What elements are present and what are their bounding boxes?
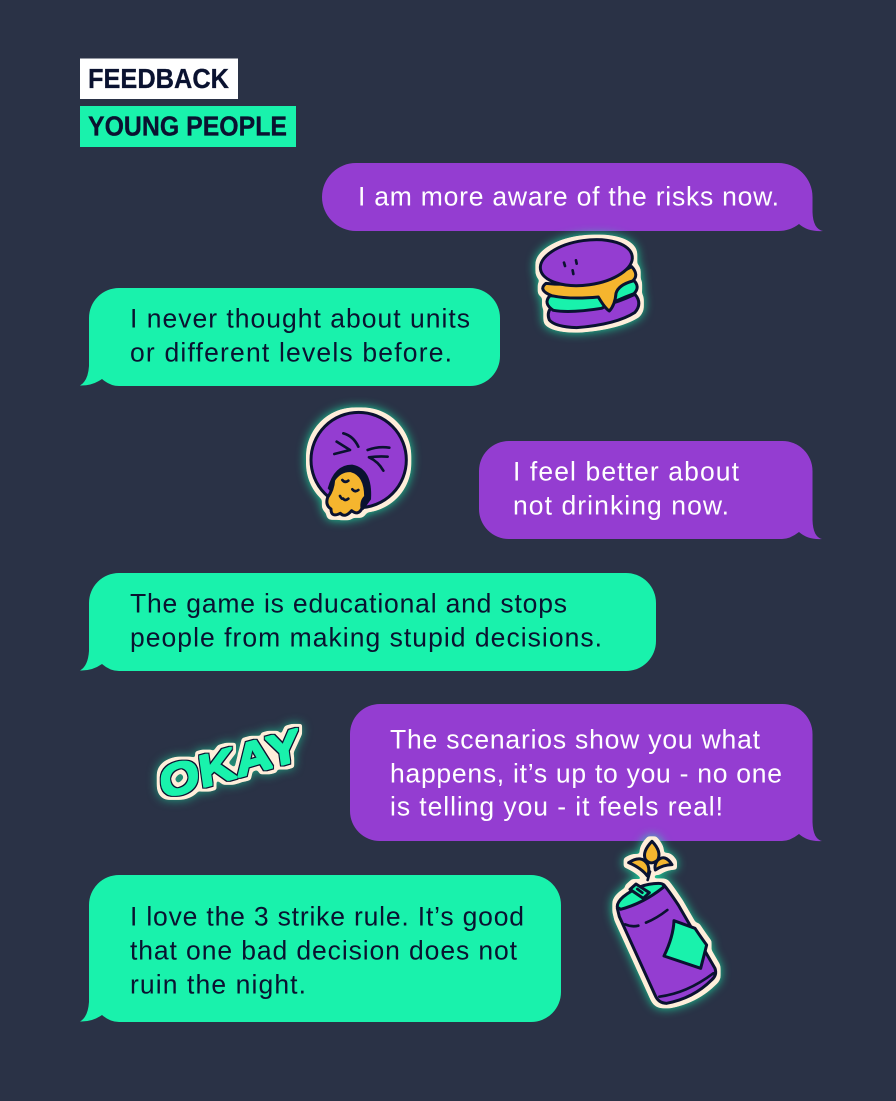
speech bubble: units <box>80 288 500 386</box>
speech bubble: scenarios <box>350 704 822 841</box>
icon: spilling drink can <box>617 841 716 1003</box>
icon: vomiting face <box>311 412 406 515</box>
heading: feedback: FEEDBACK <box>88 63 229 94</box>
speech bubble: educational: The game is educational and stops <box>130 588 567 618</box>
sticker: okay lettering: OKAY <box>157 720 304 809</box>
heading: young people: YOUNG PEOPLE <box>88 110 287 142</box>
speech bubble: not drinking: not drinking now. <box>513 490 729 520</box>
speech bubble: scenarios: The scenarios show you what <box>390 724 761 754</box>
speech bubble: not drinking: I feel better about <box>513 456 740 486</box>
speech bubble: 3 strike rule <box>80 875 561 1022</box>
speech bubble: 3 strike rule: ruin the night. <box>130 970 306 1000</box>
speech bubble: units: I never thought about units <box>130 304 470 334</box>
icon: burger <box>537 234 639 328</box>
speech bubble: scenarios: happens, it’s up to you - no one <box>390 758 782 788</box>
speech bubble: 3 strike rule: I love the 3 strike rule. It’s good <box>130 902 524 932</box>
heading: young people <box>80 106 296 147</box>
speech bubble: educational <box>80 573 656 671</box>
speech bubble: not drinking <box>479 441 822 539</box>
speech bubble: units: or different levels before. <box>130 338 452 368</box>
speech bubble: aware of risks: I am more aware of the risks now. <box>358 182 779 212</box>
speech bubble: aware of risks <box>322 163 823 231</box>
speech bubble: educational: people from making stupid decisions. <box>130 622 602 652</box>
speech bubble: scenarios: is telling you - it feels real! <box>390 792 723 822</box>
speech bubble: 3 strike rule: that one bad decision does not <box>130 936 518 966</box>
